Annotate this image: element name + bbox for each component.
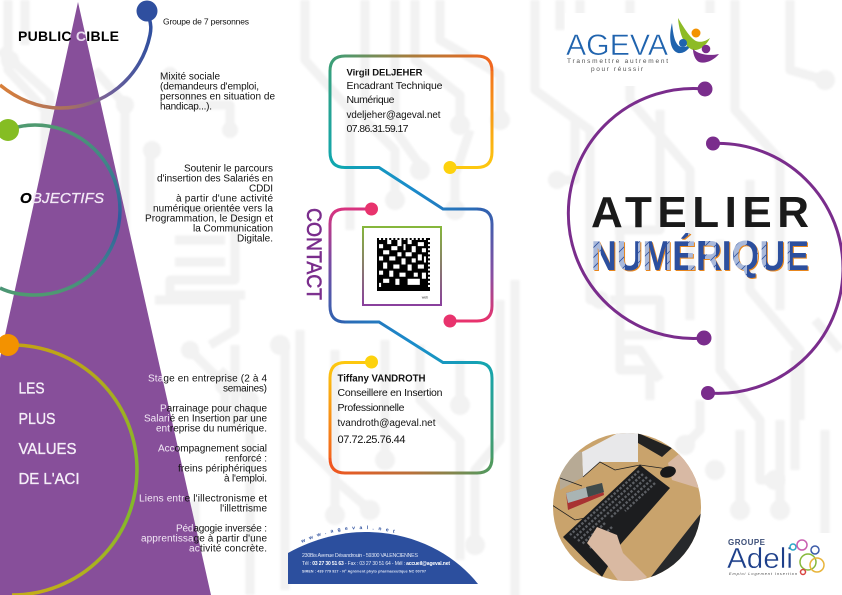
text: objectives description (145, 164, 273, 244)
contact: Tiffany Vandroth: Professionnelle (338, 402, 405, 414)
text: group size: Groupe de 7 personnes (163, 16, 249, 26)
text: added values list: Pédagogie inversée : (176, 524, 267, 534)
contact: Virgil Deljeher: 07.86.31.59.17 (346, 123, 409, 135)
text: added values list: Liens entre l'illectronisme et (139, 494, 267, 504)
qr code frame and data matrix (363, 227, 441, 305)
text: public description (160, 72, 275, 112)
logo: Groupe Adeli: Adeli (727, 543, 793, 575)
arc: public cible with blue dot (0, 0, 158, 108)
text: added values list: Stage en entreprise (2 à 4 (148, 374, 267, 384)
text: added values list: l'illettrisme (220, 504, 267, 514)
contact heading: CONTACT (302, 208, 326, 300)
text: objectives description: la Communication (193, 224, 273, 234)
contact: Tiffany Vandroth: 07.72.25.76.44 (338, 434, 406, 446)
connector: bottom contact bubble (330, 356, 492, 473)
text: public description: handicap...). (160, 102, 212, 112)
heading: objectifs: OBJECTIFS (20, 190, 104, 207)
heading: les plus values de l'aci: DE L'ACI (18, 471, 80, 488)
footer: address block: SIREN : 439 779 927 - N° Agrément phyto pharmaceutique NC 00707 (302, 570, 426, 574)
logo: Groupe Adeli (725, 533, 832, 595)
text: objectives description: Digitale. (237, 234, 273, 244)
qr code frame and data matrix: web (422, 296, 428, 300)
text: added values list (139, 374, 267, 554)
footer: address block: Tél : 03 27 30 51 63 - Fax : 03 27 30 51 64 - Mél : accueil@ageval.net (302, 561, 450, 567)
text: added values list: renforcé : (225, 454, 267, 464)
contact: Virgil Deljeher: Virgil DELJEHER (346, 68, 423, 78)
heading: les plus values de l'aci: VALUES (18, 441, 76, 458)
text: added values list: semaines) (223, 384, 267, 394)
text: added values list: à l'emploi. (224, 474, 267, 484)
text: added values list: Salarié en Insertion par une (144, 414, 267, 424)
text: public description: Mixité sociale (160, 72, 220, 82)
contact: Tiffany Vandroth: Conseillere en Insertion (338, 387, 443, 399)
text: public description: personnes en situation de (160, 92, 275, 102)
title: atelier: ATELIER (591, 188, 809, 237)
text: objectives description: Programmation, le Design et (145, 214, 273, 224)
heading: les plus values de l'aci (18, 380, 80, 488)
heading: les plus values de l'aci: PLUS (18, 411, 56, 428)
text: added values list: entreprise du numérique. (156, 424, 267, 434)
contact: Virgil Deljeher: Encadrant Technique (346, 80, 443, 92)
arc: plus values with orange dot (0, 334, 137, 595)
text: objectives description: à partir d'une activité (176, 194, 273, 204)
text: added values list: Parrainage pour chaque (160, 404, 267, 414)
footer: address block (288, 526, 478, 584)
heading: les plus values de l'aci: LES (18, 380, 44, 398)
logo: Groupe Adeli: Emploi Logement Insertion (729, 572, 797, 576)
logo: Ageval: Transmettre autrement (567, 58, 668, 65)
contact: Tiffany Vandroth (338, 374, 443, 446)
text: objectives description: Soutenir le parcours (184, 164, 273, 174)
heading: public cible: PUBLIC CIBLE (18, 28, 119, 44)
footer: address block: 230Bis Avenue Désandrouin - 59300 VALENCIENNES (302, 553, 418, 559)
arc: objectifs with green dot (0, 119, 120, 295)
contact: Virgil Deljeher (346, 68, 443, 135)
text: added values list: Accompagnement social (158, 444, 267, 454)
contact: Virgil Deljeher: vdeljeher@ageval.net (346, 110, 441, 121)
footer: address block: www.ageval.net (301, 526, 395, 543)
title frame arcs with dots (568, 82, 842, 400)
logo: Groupe Adeli: GROUPE (728, 538, 766, 547)
text: objectives description: numérique orientée vers la (153, 204, 273, 214)
text: objectives description: CDDI (249, 184, 273, 194)
text: objectives description: d'insertion des Salariés en (157, 174, 273, 184)
purple triangle (0, 2, 211, 595)
text: public description: (demandeurs d'emploi, (160, 82, 259, 92)
logo: Ageval: AGEVA (566, 29, 668, 62)
connector: middle qr bubble (330, 202, 492, 362)
contact: Tiffany Vandroth: Tiffany VANDROTH (338, 374, 426, 384)
contact: Virgil Deljeher: Numérique (346, 94, 395, 106)
title: numérique: NUMÉRIQUE (591, 232, 809, 279)
connector: top contact bubble (330, 56, 492, 209)
photo: hands on keyboard (553, 433, 701, 581)
logo: Ageval: pour réussir (591, 66, 644, 73)
text: added values list: activité concrète. (189, 544, 267, 554)
text: added values list: apprentissage à partir d'une (141, 534, 267, 544)
logo: Ageval (565, 13, 723, 86)
text: added values list: freins périphériques (178, 464, 267, 474)
contact: Tiffany Vandroth: tvandroth@ageval.net (338, 418, 436, 429)
